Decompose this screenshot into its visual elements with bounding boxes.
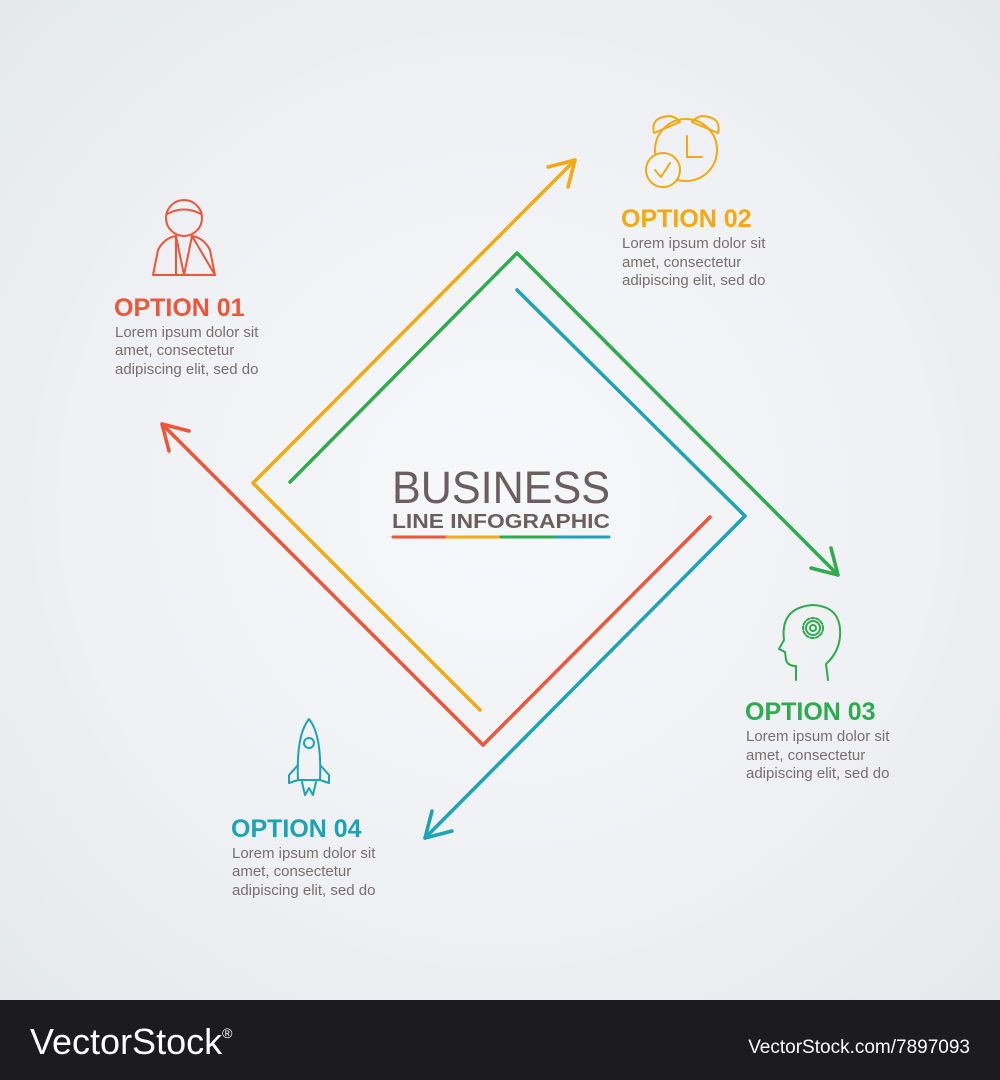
title: LINE INFOGRAPHIC <box>392 511 610 533</box>
option 04 <box>231 815 376 899</box>
option 03: OPTION 03 <box>745 698 876 726</box>
icon: alarm clock <box>646 116 719 187</box>
arrow: orange <box>253 160 575 710</box>
option 01: Lorem ipsum dolor sit <box>115 324 259 341</box>
icon: rocket <box>289 719 329 795</box>
option 01: amet, consectetur <box>115 342 234 359</box>
footer bar: ® <box>222 1025 233 1041</box>
option 02 <box>621 205 766 289</box>
option 02: amet, consectetur <box>622 254 741 271</box>
option 01 <box>114 294 259 378</box>
option 02: OPTION 02 <box>621 205 752 233</box>
arrow: green <box>290 253 838 575</box>
option 04: OPTION 04 <box>231 815 362 843</box>
icon: person <box>153 200 215 275</box>
option 03: adipiscing elit, sed do <box>746 765 889 782</box>
option 03 <box>745 698 890 782</box>
option 02: adipiscing elit, sed do <box>622 272 765 289</box>
title <box>392 462 610 537</box>
option 02: Lorem ipsum dolor sit <box>622 235 766 252</box>
arrow: red <box>162 424 710 745</box>
title: BUSINESS <box>392 462 610 513</box>
option 03: Lorem ipsum dolor sit <box>746 728 890 745</box>
footer bar <box>0 1000 1000 1080</box>
option 04: adipiscing elit, sed do <box>232 882 375 899</box>
option 01: adipiscing elit, sed do <box>115 361 258 378</box>
arrow: cyan <box>425 290 745 838</box>
footer bar: VectorStock.com/7897093 <box>748 1037 970 1058</box>
footer bar: VectorStock <box>30 1021 222 1062</box>
option 01: OPTION 01 <box>114 294 245 322</box>
option 04: Lorem ipsum dolor sit <box>232 845 376 862</box>
icon: head with gear <box>779 605 840 680</box>
option 03: amet, consectetur <box>746 747 865 764</box>
option 04: amet, consectetur <box>232 863 351 880</box>
